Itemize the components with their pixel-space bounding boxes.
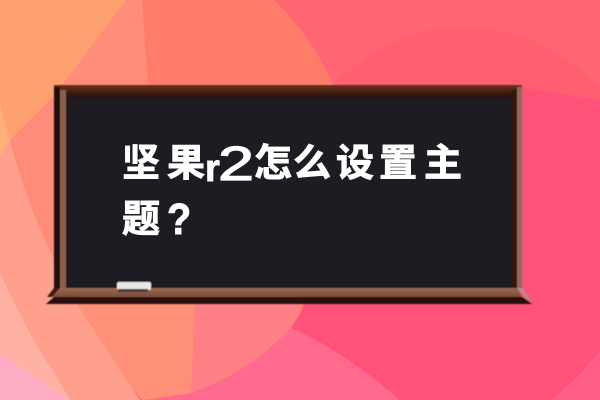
title: 么 xyxy=(293,143,331,185)
title: 置 xyxy=(379,143,417,185)
title: 坚 xyxy=(122,143,160,185)
title: 设 xyxy=(336,143,374,185)
title: 题 xyxy=(122,199,160,241)
title: 主 xyxy=(424,143,462,185)
chalk xyxy=(117,282,151,292)
title: 怎 xyxy=(254,143,292,185)
title: 果 xyxy=(167,143,205,185)
blackboard surface xyxy=(67,97,511,288)
title xyxy=(122,138,462,244)
title: r xyxy=(205,148,220,190)
title: 2 xyxy=(218,138,254,191)
title: ? xyxy=(167,195,191,244)
blackboard frame xyxy=(54,85,522,290)
chalk ledge xyxy=(46,288,532,304)
